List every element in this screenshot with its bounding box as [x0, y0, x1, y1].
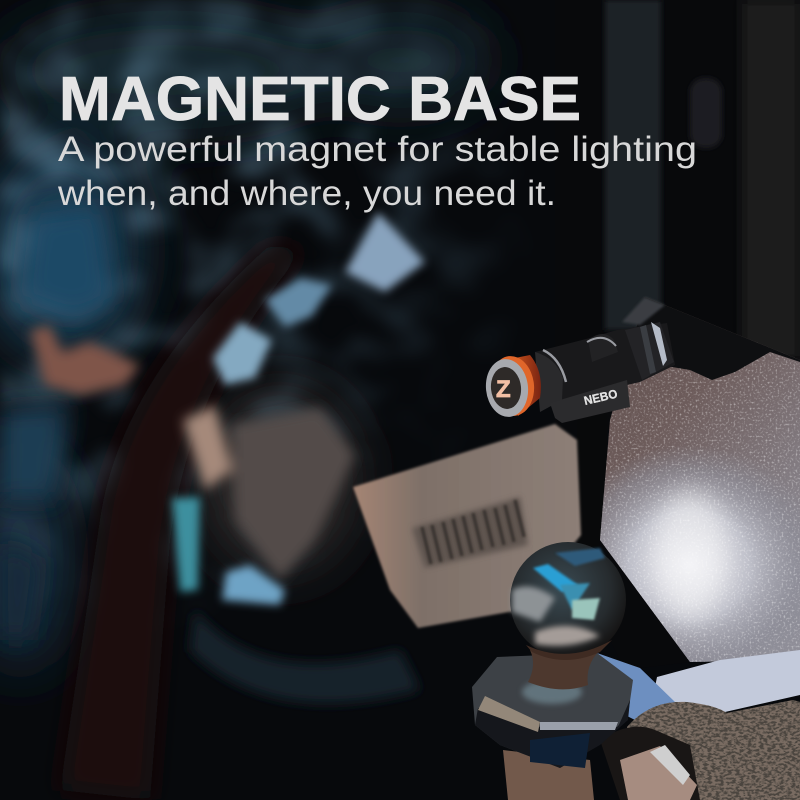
lens ring [487, 354, 537, 418]
barcode [412, 497, 528, 568]
subtitle [57, 130, 697, 213]
Z logo: Z [496, 376, 511, 403]
subtitle: A powerful magnet for stable lighting [58, 130, 697, 169]
subtitle: when, and where, you need it. [57, 174, 556, 213]
hex nut [472, 653, 633, 768]
lower nut [503, 750, 594, 800]
dark metal frame post [555, 0, 800, 670]
flashlight body [535, 323, 675, 410]
illuminated steel plate [600, 297, 800, 662]
orange head band [505, 355, 541, 416]
flashlight [483, 322, 675, 423]
hitch ball [510, 542, 626, 658]
trailer hitch [472, 542, 800, 800]
title: MAGNETIC BASE [59, 65, 581, 134]
rusty bracket [625, 700, 800, 800]
background photo [0, 0, 505, 798]
blurred engine background [0, 0, 500, 798]
ball neck [528, 650, 600, 689]
clip block [550, 380, 630, 423]
NEBO logo: NEBO [583, 387, 619, 408]
dark upper bracket [636, 297, 800, 380]
cardboard box with barcode [353, 424, 581, 628]
steel top surface [650, 650, 800, 712]
